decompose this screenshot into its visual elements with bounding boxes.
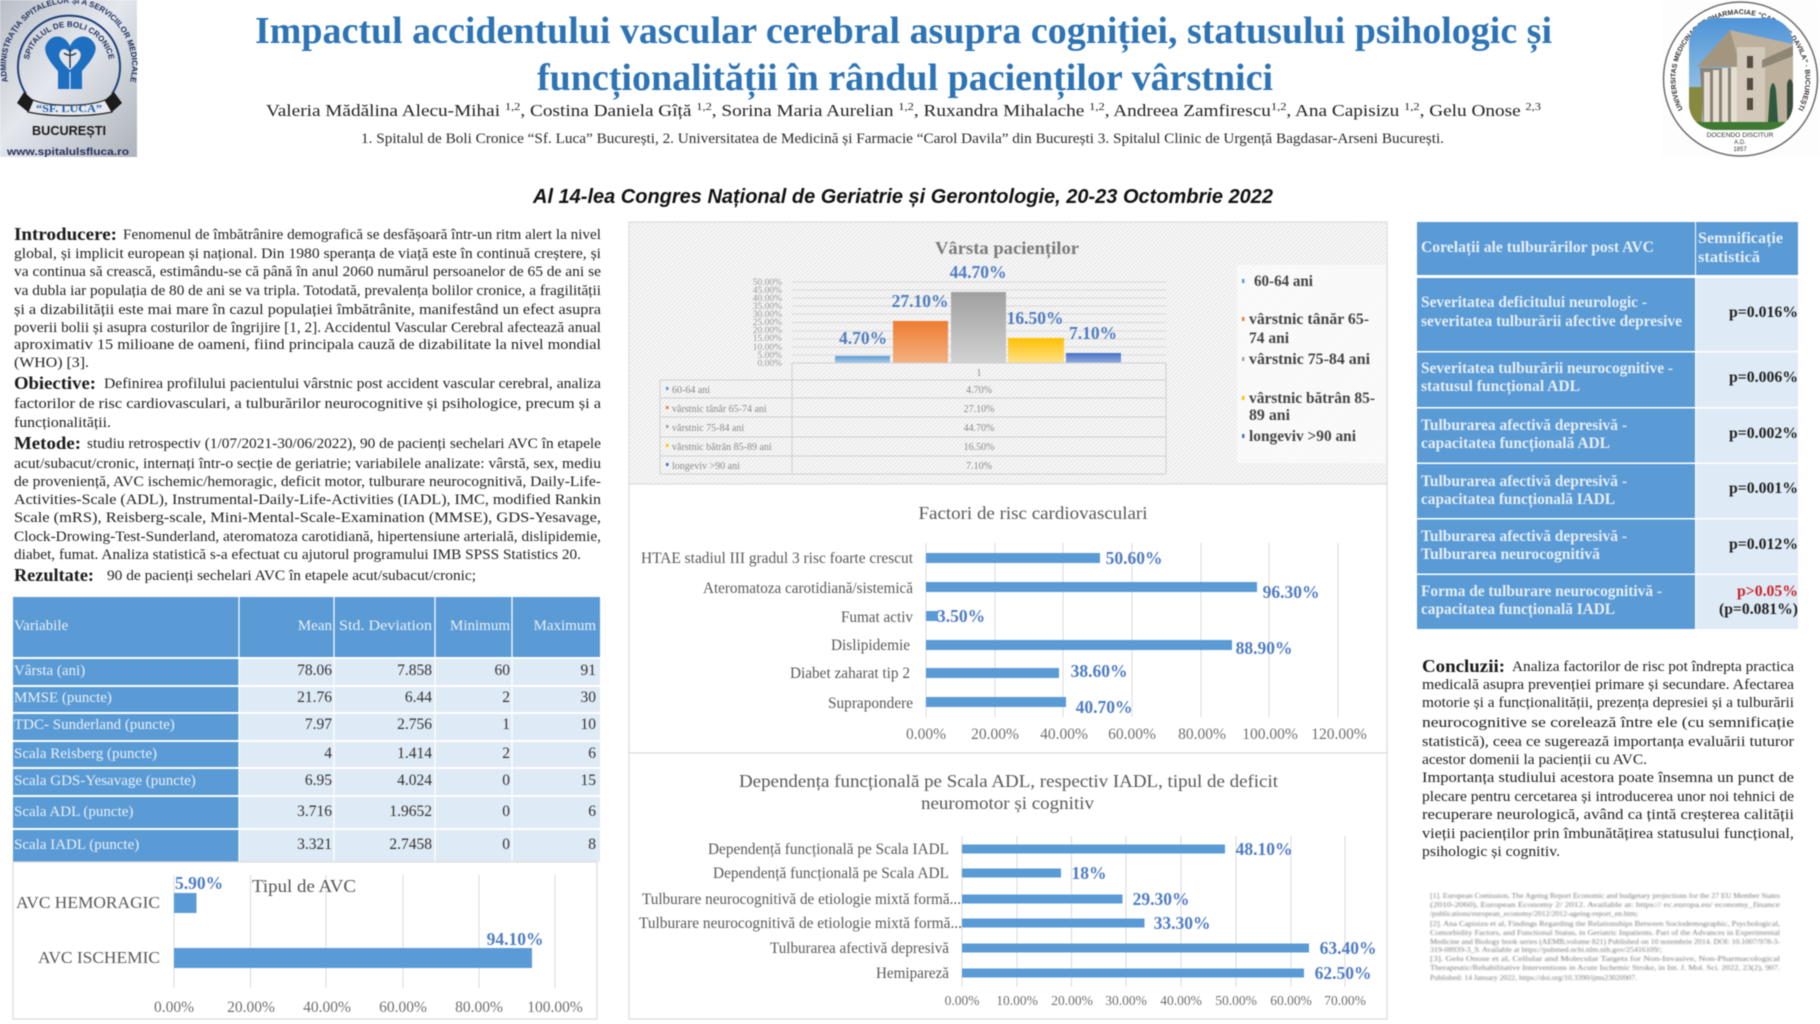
bar chart: Tipul de AVC: 94.10% [487, 929, 543, 949]
bar chart: Factori de risc cardiovasculari: 120.00% [1311, 726, 1367, 743]
table: variabile descriptive: 7.858 [397, 662, 432, 679]
bar chart: Dependența funcțională: 62.50% [1315, 963, 1371, 983]
text block: rezultate [14, 565, 476, 585]
bar chart: Vârsta pacienților: 27.10% [964, 404, 994, 415]
bar chart: Vârsta pacienților: 15.00% [753, 334, 782, 344]
text block: introducere: aproximativ 15 milioane de oameni, fiind principala cauză de dizabilitate la nivel mondial [14, 337, 601, 353]
logo: Spitalul Sf. Luca: www.spitalulsfluca.ro [6, 146, 129, 158]
table: variabile descriptive: 91 [580, 662, 596, 679]
bar chart: Vârsta pacienților: 30.00% [753, 310, 782, 320]
table: variabile descriptive: 0 [502, 836, 510, 853]
affiliations: 1. Spitalul de Boli Cronice “Sf. Luca” București, 2. Universitatea de Medicină și Farmacie “Carol Davila” din București 3. Spitalul Clinic de Urgență Bagdasar-Arseni București. [361, 131, 1444, 147]
bar chart: Tipul de AVC: 0.00% [154, 999, 194, 1016]
table: variabile descriptive: 78.06 [297, 662, 332, 679]
bar chart: Factori de risc cardiovasculari: 3.50% [937, 606, 985, 626]
text block: obiective: Obiective: [14, 373, 96, 393]
congress name: Al 14-lea Congres Național de Geriatrie și Gerontologie, 20-23 Octombrie 2022 [532, 186, 1273, 208]
table: variabile descriptive: Minimum [450, 618, 510, 634]
bar chart: Factori de risc cardiovasculari: 80.00% [1178, 726, 1226, 743]
table: variabile descriptive: Std. Deviation [339, 618, 433, 634]
bar chart: Factori de risc cardiovasculari: 38.60% [1071, 661, 1127, 681]
bar chart: Vârsta pacienților: 44.70% [950, 262, 1006, 282]
bar chart: Dependența funcțională: 60.00% [1270, 993, 1312, 1008]
table: variabile descriptive: Vârsta (ani) [14, 663, 85, 679]
text block: introducere: Introducere: [14, 224, 117, 244]
bar chart: Factori de risc cardiovasculari: 88.90% [1236, 638, 1292, 658]
bar chart: Factori de risc cardiovasculari: 40.70% [1076, 697, 1132, 717]
text block: concluzii: acestor domenii la pacienții cu AVC. [1422, 752, 1647, 768]
text block: metode [14, 433, 602, 563]
bar chart: Dependența funcțională: 30.00% [1105, 993, 1147, 1008]
table: variabile descriptive: 1.414 [397, 745, 432, 762]
legend: grupe de vârstă [1237, 265, 1386, 463]
text block: concluzii: vieții pacienților prin îmbunătățirea statusului funcțional, [1422, 826, 1794, 842]
text block: metode: Clock-Drowing-Test-Sunderland, ateromatoza carotidiană, hipertensiune arterială, dislipidemie, [14, 529, 601, 545]
table: variabile descriptive: 8 [588, 836, 596, 853]
table: variabile descriptive: 0 [502, 772, 510, 789]
bar chart: Vârsta pacienților: vârstnic tânăr 65-74 ani [672, 404, 767, 415]
table: corelații: Tulburarea neurocognitivă [1421, 546, 1600, 563]
bar chart: Vârsta pacienților: 4.70% [966, 385, 992, 396]
bar chart: Vârsta pacienților: 16.50% [1007, 308, 1063, 328]
bar chart: Vârsta pacienților: Vârsta pacienților [935, 238, 1079, 259]
title [255, 10, 1552, 100]
authors: 1,2 [505, 101, 520, 113]
text block: metode: diabet, fumat. Analiza statistică s-a efectuat cu ajutorul programului IMB SPSS Statistics 20. [14, 547, 581, 563]
bar chart: Vârsta pacienților: 10.00% [753, 343, 782, 353]
bar chart: Vârsta pacienților: 50.00% [753, 278, 782, 288]
authors: 1,2 [898, 101, 914, 113]
references: [3]. Gelu Onose et al, Cellular and Molecular Targets for Non-Invasive, Non-Pharmacological [1430, 954, 1780, 963]
logo: UMF Carol Davila: DOCENDO DISCITUR [1707, 132, 1774, 139]
text block: concluzii: Concluzii: [1422, 656, 1505, 676]
table: corelații: severitatea tulburării afective depresive [1421, 313, 1682, 330]
table: corelații: statusul funcțional ADL [1421, 378, 1580, 395]
bar chart: Vârsta pacienților: longeviv >90 ani [672, 461, 740, 472]
text block: obiective [14, 373, 601, 431]
table: variabile descriptive: 60 [494, 662, 510, 679]
table: corelații: capacitatea funcțională IADL [1421, 491, 1615, 508]
references [1430, 891, 1781, 982]
bar chart: Dependența funcțională: Tulburare neurocognitivă de etiologie mixtă formă... [639, 915, 962, 932]
legend: grupe de vârstă: vârstnic bătrân 85- [1249, 390, 1375, 407]
logo: UMF Carol Davila [1662, 0, 1819, 158]
text block: introducere: (WHO) [3]. [14, 355, 89, 371]
bar chart: Tipul de AVC: AVC HEMORAGIC [16, 893, 160, 912]
bar chart: Factori de risc cardiovasculari: Factori de risc cardiovasculari [918, 503, 1148, 523]
bar chart: Vârsta pacienților: 5.00% [757, 351, 782, 361]
bar chart: Vârsta pacienților: 40.00% [753, 294, 782, 304]
authors: 2,3 [1525, 101, 1542, 113]
text block: rezultate: 90 de pacienți sechelari AVC în etapele acut/subacut/cronic; [107, 568, 476, 584]
table: variabile descriptive: 21.76 [297, 689, 332, 706]
table: variabile descriptive: Scala GDS-Yesavage (puncte) [14, 773, 196, 789]
table: corelații: statistică [1698, 249, 1760, 266]
bar chart: Tipul de AVC: 80.00% [455, 999, 503, 1016]
table: variabile descriptive: 2 [502, 745, 510, 762]
table: variabile descriptive: 2 [502, 689, 510, 706]
bar chart: Vârsta pacienților: 44.70% [964, 423, 994, 434]
table: corelații: Semnificație [1698, 230, 1783, 247]
bar chart: Factori de risc cardiovasculari: 60.00% [1108, 726, 1156, 743]
bar chart: Vârsta pacienților: vârstnic bătrân 85-89 ani [672, 442, 772, 453]
table: corelații: p=0.016% [1729, 304, 1798, 321]
table: variabile descriptive: 10 [580, 716, 596, 733]
text block: concluzii: Analiza factorilor de risc pot îndrepta practica [1512, 659, 1794, 675]
table: variabile descriptive: 6.95 [305, 772, 332, 789]
references: /publications/european_economy/2012/2012-ageing-report_en.htm; [1430, 909, 1638, 918]
table: variabile descriptive: 7.97 [305, 716, 332, 733]
text block: metode: acut/subacut/cronic, internați într-o secție de geriatrie; variabilele analizate: vârstă, sex, mediu [14, 456, 602, 472]
legend: grupe de vârstă: 60-64 ani [1254, 273, 1314, 290]
bar chart: Dependența funcțională: 33.30% [1154, 913, 1210, 933]
table: variabile descriptive: Mean [298, 618, 332, 634]
table: corelații: Corelații ale tulburărilor post AVC [1421, 239, 1654, 256]
bar chart: Dependența funcțională: 10.00% [996, 993, 1038, 1008]
references: Comorbidity Factors, and Functional Status, in Geriatric Inpatients. Part of the Advances in Experimental [1430, 928, 1780, 937]
text block: metode: de proveniență, AVC ischemic/hemoragic, deficit motor, tulburare neurocognitivă, Daily-Life- [14, 474, 601, 490]
bar chart: Dependența funcțională: Tulburare neurocognitivă de etiologie mixtă formă... [642, 891, 961, 908]
bar chart: Vârsta pacienților: 7.10% [1069, 323, 1117, 343]
bar chart: Vârsta pacienților: 7.10% [966, 461, 992, 472]
authors: , Gelu Onose [1420, 101, 1525, 120]
text block: concluzii: neurocognitive se corelează între ele (cu semnificație [1422, 715, 1794, 731]
bar chart: Tipul de AVC: 40.00% [303, 999, 351, 1016]
authors: 1,2 [1404, 101, 1420, 113]
table: variabile descriptive: 4.024 [397, 772, 432, 789]
bar chart: Factori de risc cardiovasculari: 0.00% [906, 726, 946, 743]
bar chart: Tipul de AVC: AVC ISCHEMIC [38, 948, 160, 967]
bar chart: Factori de risc cardiovasculari [629, 484, 1387, 753]
references: 319-08939-3_9. Available at https://pubmed.ncbi.nlm.nih.gov/25416109/; [1430, 945, 1662, 954]
text block: concluzii: medicală asupra prevenției primare și secundare. Afectarea [1422, 677, 1794, 693]
text block: introducere: poverii bolii și asupra costurilor de îngrijire [1, 2]. Accidentul Vascular Cerebral afectează anual [14, 320, 601, 336]
logo: UMF Carol Davila: UNIVERSITAS MEDICINAE ET PHARMACIAE “CAROLUS DAVILA” · BUCUREȘTI [1670, 8, 1811, 112]
table: variabile descriptive: 1.9652 [389, 803, 432, 820]
authors: Valeria Mădălina Alecu-Mihai [266, 101, 473, 120]
authors: , Sorina Maria Aurelian [712, 101, 898, 120]
text block: obiective: factorilor de risc cardiovasculari, a tulburărilor neurocognitive și psihologice, precum și a [14, 396, 601, 412]
table: variabile descriptive: 1 [502, 716, 510, 733]
table: corelații: Tulburarea afectivă depresivă - [1421, 528, 1627, 545]
bar chart: Factori de risc cardiovasculari: HTAE stadiul III gradul 3 risc foarte crescut [641, 550, 914, 567]
table: variabile descriptive: MMSE (puncte) [14, 690, 112, 706]
text block: concluzii: plecare pentru cercetarea și introducerea unor noi tehnici de [1422, 789, 1794, 805]
bar chart: Dependența funcțională: 18% [1072, 863, 1106, 883]
text block: rezultate: Rezultate: [14, 565, 94, 585]
legend: grupe de vârstă: 74 ani [1249, 330, 1290, 347]
table: variabile descriptive: 30 [580, 689, 596, 706]
authors: 1,2 [1271, 101, 1286, 113]
bar chart: Tipul de AVC: Tipul de AVC [252, 876, 356, 896]
table: variabile descriptive: 6 [588, 745, 596, 762]
table: corelații: capacitatea funcțională ADL [1421, 435, 1610, 452]
text block: concluzii: statistică), ceea ce sugerează importanța evaluării tuturor [1422, 734, 1794, 750]
bar chart: Dependența funcțională [629, 753, 1387, 1019]
table: corelații: Severitatea tulburării neurocognitive - [1421, 360, 1673, 377]
bar chart: Dependența funcțională: Dependență funcțională pe Scala ADL [713, 865, 949, 882]
bar chart: Dependența funcțională: 29.30% [1133, 889, 1189, 909]
bar chart: Dependența funcțională: 48.10% [1236, 839, 1292, 859]
bar chart: Vârsta pacienților: 27.10% [892, 291, 948, 311]
table: variabile descriptive: 4 [324, 745, 332, 762]
table: corelații: Tulburarea afectivă depresivă - [1421, 417, 1627, 434]
bar chart: Tipul de AVC: 60.00% [379, 999, 427, 1016]
authors: , Ruxandra Mihalache [914, 101, 1089, 120]
references: [1]. European Comission, The Ageing Report Economic and budgetary projections for the 27 EU Member States [1430, 891, 1780, 900]
bar chart: Dependența funcțională: Dependența funcțională pe Scala ADL, respectiv IADL, tipul de deficit [739, 771, 1278, 791]
authors: , Ana Capisizu [1286, 101, 1404, 120]
table: variabile descriptive: 2.756 [397, 716, 432, 733]
text block: introducere: Fenomenul de îmbătrânire demografică se desfășoară într-un ritm alert la nivel [123, 227, 601, 243]
table: corelații: Severitatea deficitului neurologic - [1421, 294, 1647, 311]
bar chart: Dependența funcțională: 50.00% [1215, 993, 1257, 1008]
text block: concluzii: motorie și a funcționalității, prezența depresiei și a tulburării [1422, 695, 1794, 711]
table: variabile descriptive: Variabile [14, 618, 68, 634]
bar chart: Vârsta pacienților: 4.70% [839, 328, 887, 348]
authors: 1,2 [1089, 101, 1105, 113]
table: variabile descriptive: 3.321 [297, 836, 332, 853]
table: corelații: p>0.05% [1737, 583, 1798, 600]
bar chart: Dependența funcțională: 20.00% [1051, 993, 1093, 1008]
bar chart: Vârsta pacienților: 16.50% [964, 442, 994, 453]
table: variabile descriptive: 15 [580, 772, 596, 789]
references: Medicine and Biology book series (AEMB,volume 821) Published on 10 noiembrie 2014. DOI: 10.1007/978-3- [1430, 937, 1781, 946]
table: corelații: Forma de tulburare neurocognitivă - [1421, 583, 1662, 600]
table: variabile descriptive: 2.7458 [389, 836, 432, 853]
text block: metode: studiu retrospectiv (1/07/2021-30/06/2022), 90 de pacienți sechelari AVC în etapele [87, 436, 601, 452]
text block: obiective: funcționalității. [14, 415, 111, 431]
bar chart: Factori de risc cardiovasculari: Diabet zaharat tip 2 [790, 665, 910, 682]
text block: concluzii: Importanța studiului acestora poate însemna un punct de [1422, 770, 1794, 786]
bar chart: Dependența funcțională: Hemipareză [876, 965, 949, 982]
table: variabile descriptive: Maximum [534, 618, 596, 634]
text block: introducere [14, 224, 601, 371]
logo: UMF Carol Davila: 1857 [1733, 147, 1747, 153]
bar chart: Vârsta pacienților: 1 [976, 368, 982, 379]
bar chart: Factori de risc cardiovasculari: 40.00% [1040, 726, 1088, 743]
table: corelații [1417, 222, 1798, 629]
bar chart: Dependența funcțională: Dependență funcțională pe Scala IADL [708, 841, 949, 858]
title: funcționalității în rândul pacienților vârstnici [537, 57, 1273, 100]
bar chart: Vârsta pacienților: 45.00% [753, 286, 782, 296]
bar chart: Dependența funcțională: Tulburarea afectivă depresivă [770, 940, 949, 957]
bar chart: Dependența funcțională: 40.00% [1160, 993, 1202, 1008]
text block: introducere: global, și implicit european și național. Din 1980 speranța de viață este în continuă creștere, și [14, 246, 601, 262]
bar chart: Dependența funcțională: 0.00% [945, 993, 979, 1008]
bar chart: Vârsta pacienților: 60-64 ani [672, 385, 710, 396]
table: variabile descriptive: 6 [588, 803, 596, 820]
bar chart: Dependența funcțională: 70.00% [1324, 993, 1366, 1008]
bar chart: Tipul de AVC: 20.00% [227, 999, 275, 1016]
legend: grupe de vârstă: vârstnic tânăr 65- [1249, 311, 1369, 328]
table: corelații: p=0.001% [1729, 480, 1798, 497]
bar chart: Factori de risc cardiovasculari: 50.60% [1106, 548, 1162, 568]
table: corelații: p=0.012% [1729, 536, 1798, 553]
bar chart: Factori de risc cardiovasculari: 20.00% [971, 726, 1019, 743]
table: variabile descriptive: Scala IADL (puncte) [14, 837, 139, 853]
bar chart: Vârsta pacienților: 25.00% [753, 318, 782, 328]
legend: grupe de vârstă: 89 ani [1249, 407, 1291, 424]
bar chart: Factori de risc cardiovasculari: Suprapondere [828, 695, 913, 712]
authors: , Andreea Zamfirescu [1105, 101, 1271, 120]
table: corelații: p=0.006% [1729, 369, 1798, 386]
bar chart: Factori de risc cardiovasculari: 96.30% [1263, 582, 1319, 602]
text block: obiective: Definirea profilului pacientului vârstnic post accident vascular cerebral, analiza [104, 376, 601, 392]
table: corelații: capacitatea funcțională IADL [1421, 601, 1615, 618]
bar chart: Dependența funcțională: neuromotor și cognitiv [921, 793, 1094, 813]
bar chart: Factori de risc cardiovasculari: Dislipidemie [831, 637, 910, 654]
table: variabile descriptive: Scala Reisberg (puncte) [14, 746, 157, 762]
legend: grupe de vârstă: longeviv >90 ani [1249, 428, 1357, 445]
bar chart: Factori de risc cardiovasculari: 100.00% [1242, 726, 1298, 743]
references: Published: 14 January 2022, https://doi.org/10.3390/ijms23020907. [1430, 973, 1637, 982]
table: corelații: p=0.002% [1729, 425, 1798, 442]
bar chart: Vârsta pacienților: 20.00% [753, 326, 782, 336]
table: corelații: Tulburarea afectivă depresivă - [1421, 473, 1627, 490]
bar chart: Tipul de AVC: 100.00% [527, 999, 583, 1016]
text block: introducere: și a dizabilității este mai mare în cazul populației îmbătrânite, manifestând un efect asupra [14, 302, 601, 318]
bar chart: Tipul de AVC: 5.90% [175, 873, 223, 893]
bar chart: Dependența funcțională: 63.40% [1320, 938, 1376, 958]
bar chart: Vârsta pacienților: vârstnic 75-84 ani [672, 423, 744, 434]
authors: 1,2 [696, 101, 712, 113]
references: (2010-2060), European Economy 2/ 2012. Available at: https:// ec.europa.eu/ economy_finance [1430, 900, 1781, 909]
references: [2]. Ana Capisizu et al, Findings Regarding the Relationships Between Sociodemographic, Psychological, [1430, 919, 1780, 928]
logo: Spitalul Sf. Luca [0, 0, 138, 158]
text block: concluzii: psihologic și cognitiv. [1422, 844, 1560, 860]
text block: metode: Activities-Scale (ADL), Instrumental-Daily-Life-Activities (IADL), IMC, modified Rankin [14, 492, 602, 508]
table: corelații: (p=0.081%) [1719, 601, 1798, 618]
table: variabile descriptive: TDC- Sunderland (puncte) [14, 717, 175, 733]
table: variabile descriptive: 3.716 [297, 803, 332, 820]
logo: UMF Carol Davila: A.D. [1734, 140, 1746, 146]
logo: Spitalul Sf. Luca: BUCUREȘTI [32, 124, 106, 138]
title: Impactul accidentului vascular cerebral asupra cogniției, statusului psihologic și [255, 10, 1552, 53]
logo: Spitalul Sf. Luca: SPITALUL DE BOLI CRONICE [23, 20, 115, 60]
text block: introducere: va continua să crească, estimându-se că până în anul 2060 numărul persoanelor de 65 de ani se [14, 264, 601, 280]
bar chart: Vârsta pacienților [629, 222, 1387, 484]
bar chart: Vârsta pacienților: 35.00% [753, 302, 782, 312]
text block: metode: Scale (mRS), Reisberg-scale, Mini-Mental-Scale-Examination (MMSE), GDS-Yesavage, [14, 510, 601, 526]
table: variabile descriptive: 0 [502, 803, 510, 820]
text block: concluzii [1422, 656, 1794, 860]
bar chart: Factori de risc cardiovasculari: Fumat activ [841, 609, 913, 626]
references: Therapeutic/Rehabilitative Interventions in Acute Ischemic Stroke, in Int. J. Mol. Sci. 2022, 23(2), 907. [1430, 963, 1780, 972]
table: variabile descriptive: 6.44 [405, 689, 432, 706]
text block: metode: Metode: [14, 433, 81, 453]
bar chart: Tipul de AVC [13, 862, 597, 1019]
bar chart: Factori de risc cardiovasculari: Ateromatoza carotidiană/sistemică [703, 580, 913, 597]
table: variabile descriptive [13, 597, 600, 862]
text block: concluzii: recuperare neurologică, având ca țintă creșterea calității [1422, 807, 1794, 823]
text block: introducere: va dubla iar populația de 80 de ani se va tripla. Totodată, prevalența bolilor cronice, a fragilității [14, 283, 601, 299]
table: variabile descriptive: Scala ADL (puncte) [14, 804, 133, 820]
authors: , Costina Daniela Gîță [520, 101, 696, 120]
bar chart: Vârsta pacienților: 0.00% [757, 359, 782, 369]
legend: grupe de vârstă: vârstnic 75-84 ani [1249, 351, 1371, 368]
logo: Spitalul Sf. Luca: “SF. LUCA” [36, 104, 102, 115]
